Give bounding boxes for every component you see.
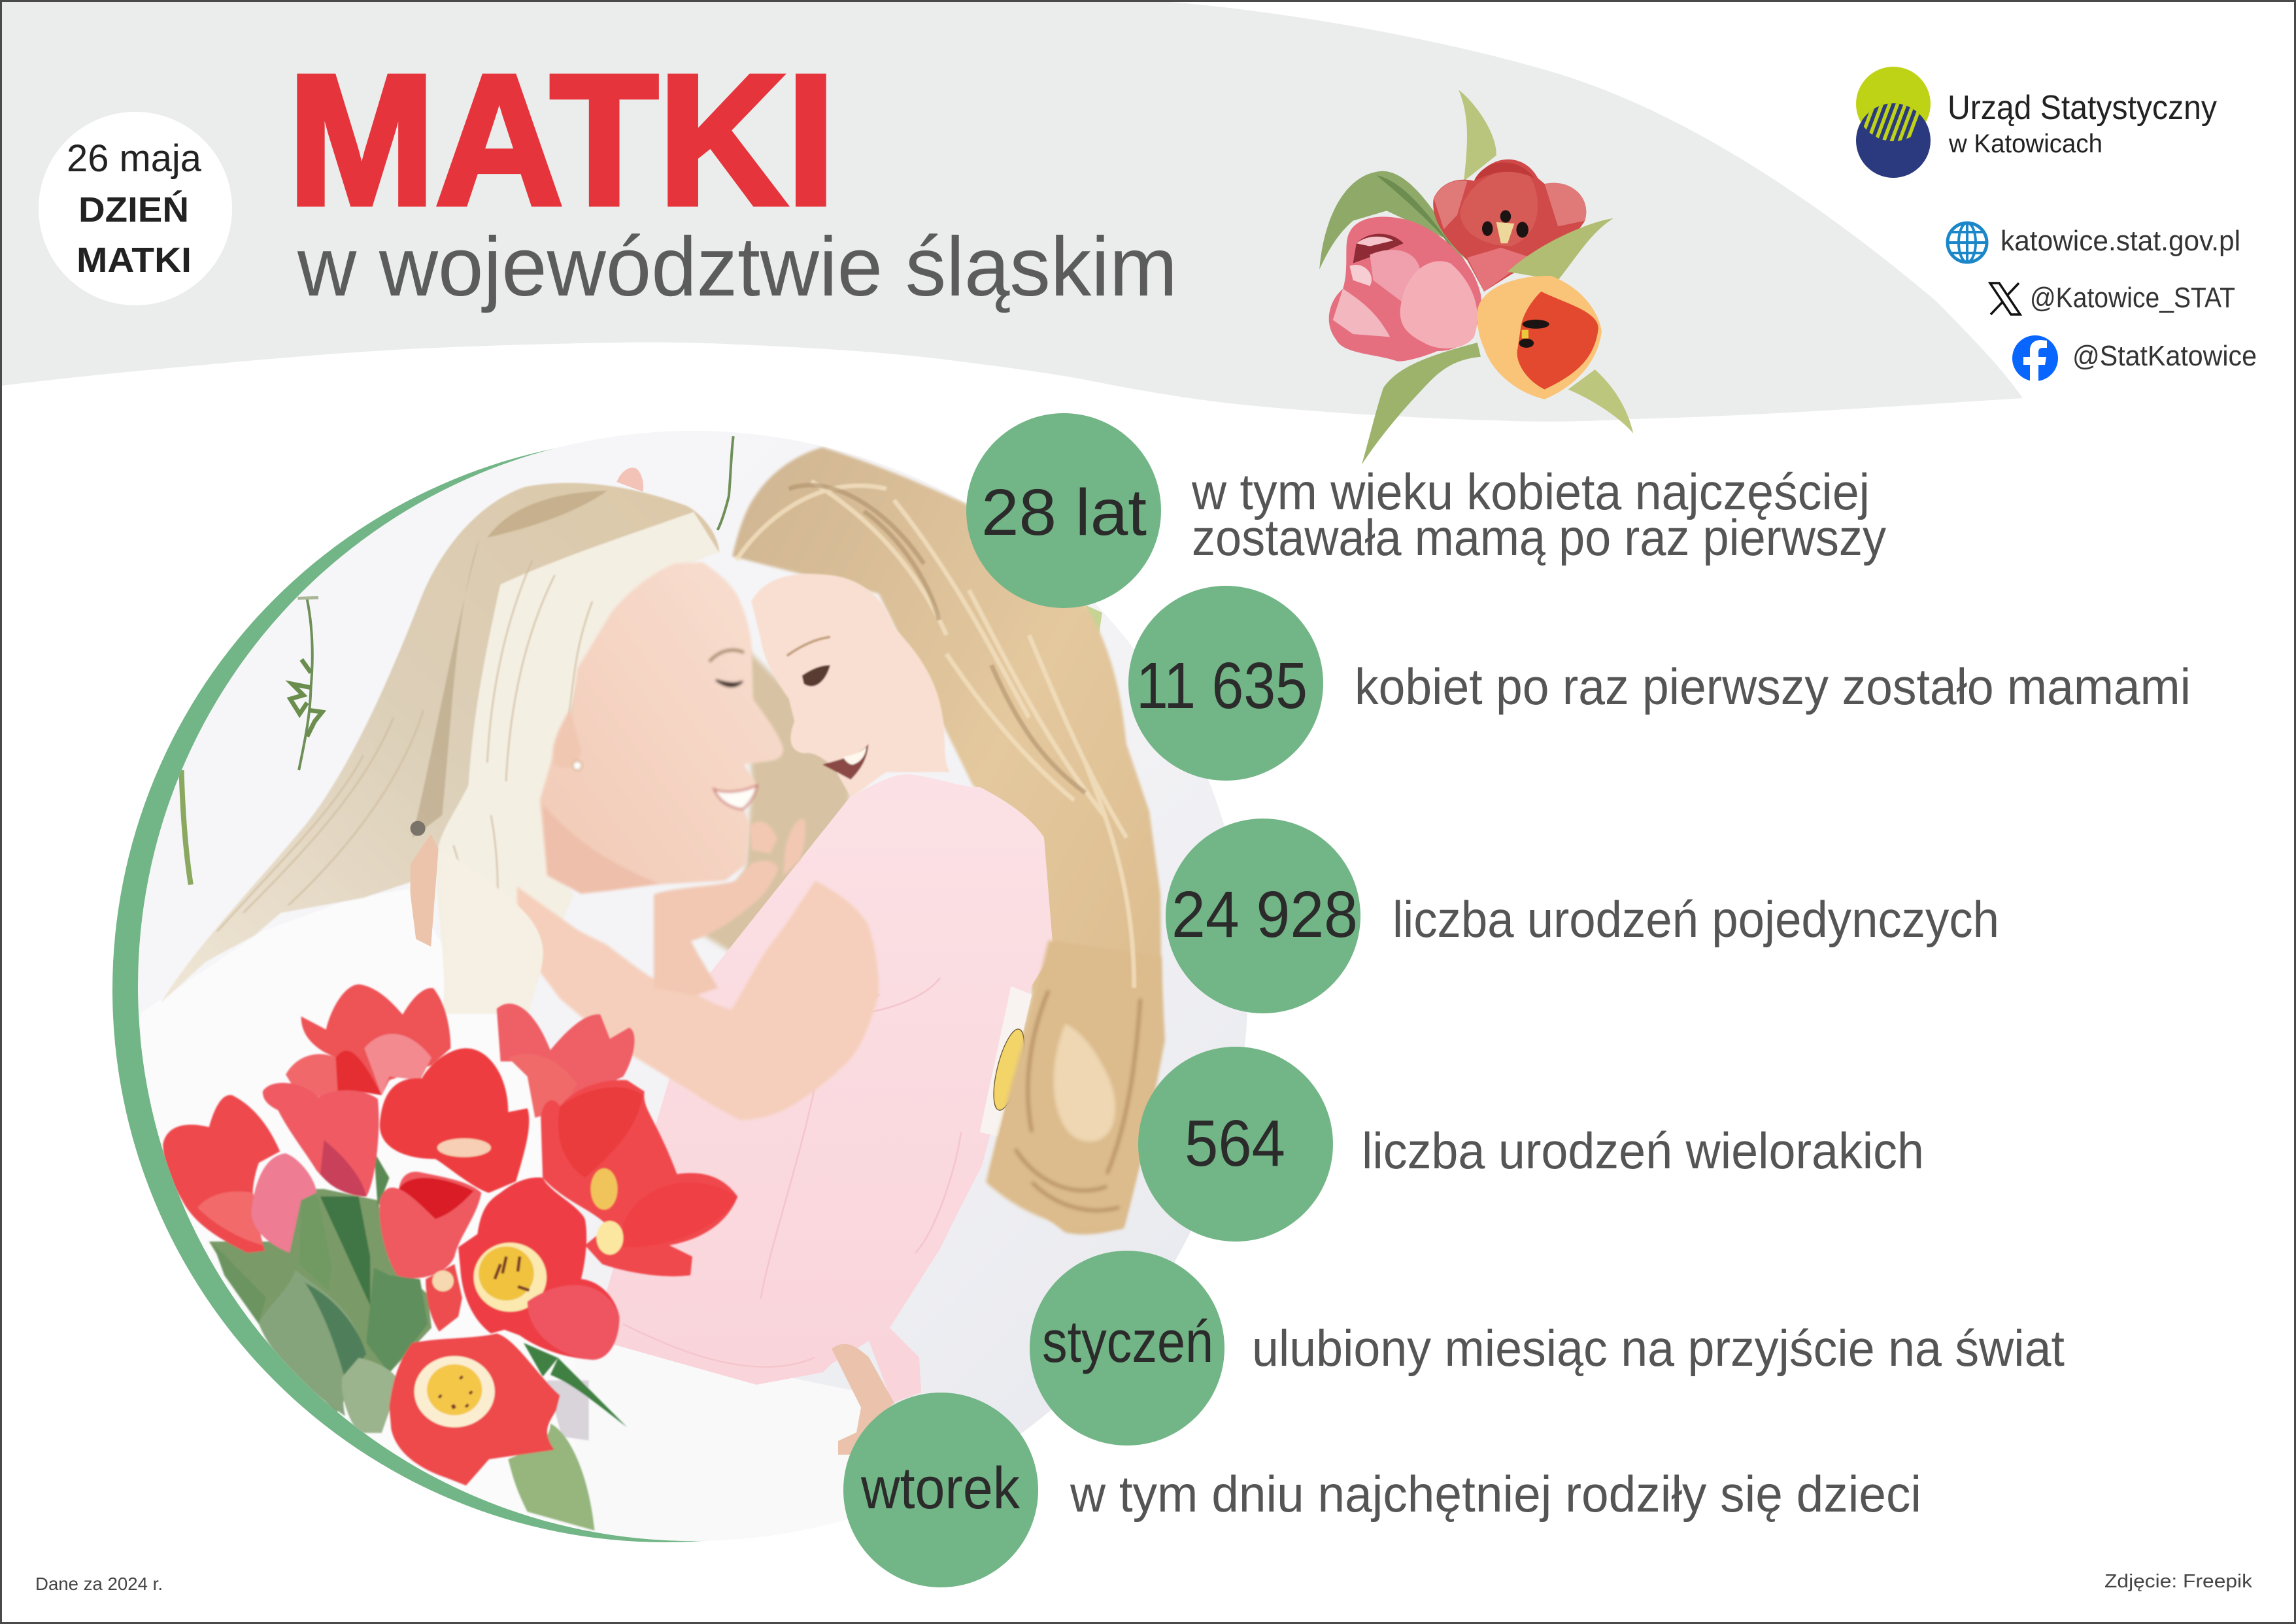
icon: X xyxy=(1990,283,2020,314)
stat circle xyxy=(1138,1047,1333,1242)
stat description: liczba urodzeń wielorakich xyxy=(1362,1122,1924,1179)
stat description line 2: zostawała mamą po raz pierwszy xyxy=(1192,509,1886,566)
mother white shirt xyxy=(141,1040,582,1530)
stat description: w tym wieku kobieta najczęściej xyxy=(1191,463,1870,520)
logo and social links xyxy=(1850,67,2257,381)
stat circle xyxy=(966,413,1161,608)
badge circle xyxy=(39,112,232,305)
icon: Facebook xyxy=(2012,335,2058,381)
stat circle xyxy=(843,1393,1038,1587)
stat description: ulubiony miesiąc na przyjście na świat xyxy=(1252,1319,2065,1377)
photo credit: Zdjęcie: Freepik xyxy=(2104,1571,2253,1592)
stat circle xyxy=(1128,586,1323,781)
logo text: Urząd Statystyczny xyxy=(1948,89,2217,127)
icon: globe xyxy=(1948,223,1987,262)
daughter pink t-shirt xyxy=(607,774,1053,1403)
Facebook handle: @StatKatowice xyxy=(2072,340,2257,372)
stat value: 24 928 xyxy=(1172,878,1358,951)
white trousers xyxy=(575,1345,861,1541)
mother hand on waist xyxy=(832,1344,894,1455)
mother fingers and front hair lock xyxy=(411,821,543,1013)
stat value: 11 635 xyxy=(1136,649,1308,722)
green crescent behind photo xyxy=(112,437,1217,1542)
logo: Urząd Statystyczny mark xyxy=(1850,67,1931,178)
photo background xyxy=(131,425,1255,1549)
badge text: 26 maja: 26 maja xyxy=(67,137,202,180)
shirt patch xyxy=(623,978,1032,1367)
stat value: wtorek xyxy=(860,1456,1021,1521)
date badge xyxy=(39,112,232,305)
stat: first-time mothers xyxy=(1128,586,2191,781)
illustration: watercolour tulips xyxy=(1319,90,1633,465)
stat: first-time mother age xyxy=(966,413,1886,608)
stat description: kobiet po raz pierwszy zostało mamami xyxy=(1355,658,2191,715)
footnote: data year: Dane za 2024 r. xyxy=(35,1574,163,1594)
title: MATKI xyxy=(288,37,836,244)
logo subtext: w Katowicach xyxy=(1948,129,2102,158)
stat circle xyxy=(1166,819,1360,1013)
tulip bouquet xyxy=(163,985,737,1531)
daughter lower curls xyxy=(986,940,1161,1228)
stat value: 564 xyxy=(1185,1107,1285,1180)
mother hair xyxy=(161,483,719,1013)
daughter face and hair strands xyxy=(736,481,1134,988)
subtitle: w województwie śląskim xyxy=(297,220,1177,314)
stat: favourite month xyxy=(1030,1251,2065,1446)
badge text: MATKI: MATKI xyxy=(76,241,192,280)
photo: mother and daughter with tulips xyxy=(131,425,1255,1549)
stat: favourite weekday xyxy=(843,1393,1921,1587)
daughter back hair xyxy=(703,647,850,961)
website link: katowice.stat.gov.pl xyxy=(2001,225,2240,257)
badge text: DZIEŃ: DZIEŃ xyxy=(78,190,189,229)
stat: multiple births xyxy=(1138,1047,1924,1242)
daughter hair xyxy=(732,447,1165,1234)
stat value: styczeń xyxy=(1042,1310,1213,1375)
stat: single births xyxy=(1166,819,1999,1013)
child hand and arm xyxy=(517,819,879,1120)
stat circle xyxy=(1030,1251,1224,1446)
stat value: 28 lat xyxy=(981,476,1147,549)
mother face and neck xyxy=(540,562,783,894)
header grey wave xyxy=(1,1,2023,422)
background stems xyxy=(181,436,1102,885)
stat description: liczba urodzeń pojedynczych xyxy=(1393,890,1999,948)
stat description: w tym dniu najchętniej rodziły się dzieci xyxy=(1070,1465,1921,1523)
X handle: @Katowice_STAT xyxy=(2030,282,2235,314)
